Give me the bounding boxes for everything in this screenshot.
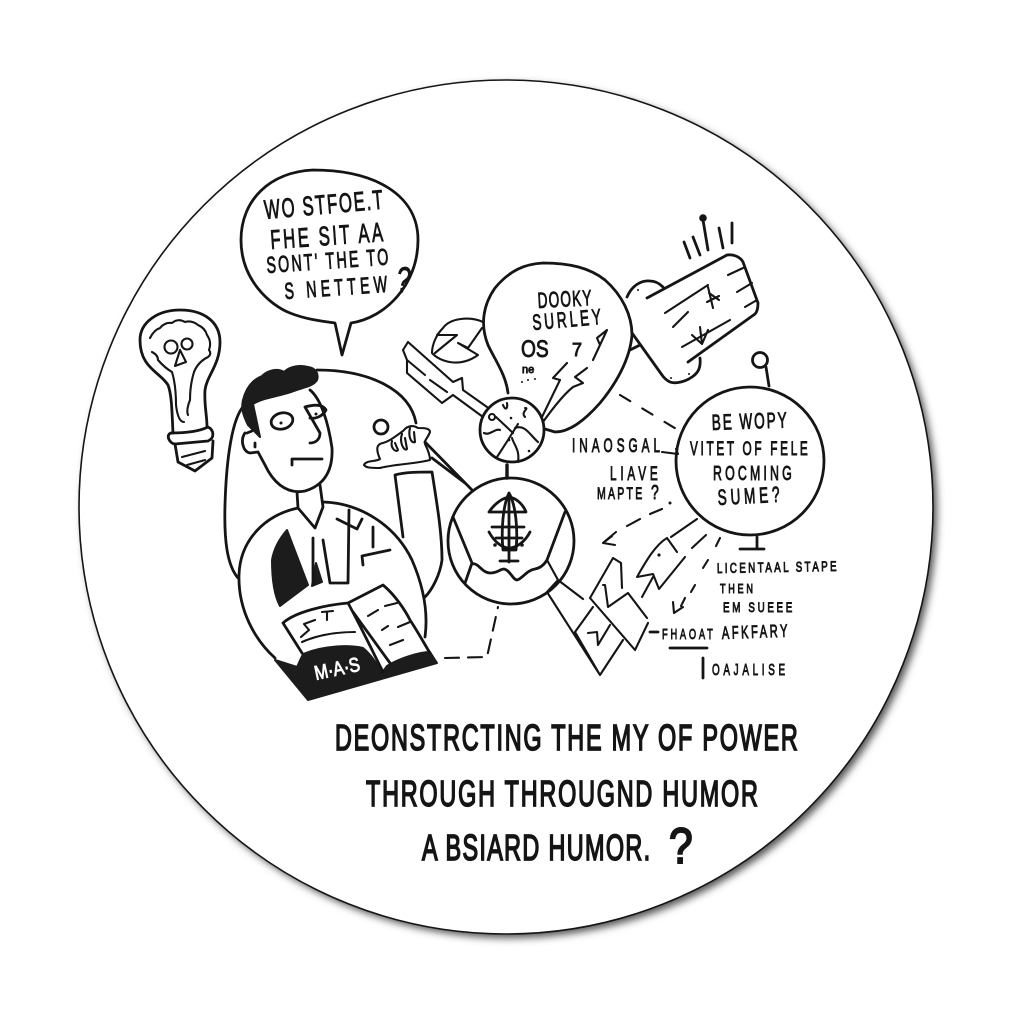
lightning bolts — [542, 330, 607, 422]
speech bubble text: SONT' THE TO — [266, 245, 389, 279]
question globe — [662, 352, 824, 549]
background blob behind person — [225, 370, 442, 597]
speech bubble text: WO STFOE.T — [263, 185, 384, 225]
cracked globe — [480, 398, 544, 462]
key shape — [403, 342, 487, 417]
neck and collar — [297, 485, 323, 528]
title: DEONSTRCTING THE MY OF POWER — [335, 719, 798, 758]
book — [275, 585, 437, 700]
right eye and nose — [305, 405, 326, 443]
left eye — [269, 410, 295, 432]
icon: light bulb — [140, 310, 220, 471]
bird icon — [637, 519, 706, 597]
card icon — [627, 255, 758, 383]
zigzag shapes — [547, 558, 648, 675]
side labels: LIAVE — [610, 464, 658, 485]
mouth — [292, 459, 322, 465]
lower circle emblem — [448, 478, 574, 604]
label strokes — [650, 632, 707, 678]
side labels: FHAOAT — [662, 626, 713, 643]
side labels: INAOSGAL — [572, 436, 660, 457]
tie — [312, 563, 322, 586]
dashed arrow down — [673, 538, 720, 613]
connector: globe to emblem — [505, 465, 509, 478]
balloon text: SURLEY — [531, 304, 602, 335]
side labels: OAJALISE — [712, 661, 785, 679]
title: ? — [669, 818, 693, 874]
question globe text: SUME? — [717, 481, 780, 510]
connector: book to lower circle — [445, 607, 498, 658]
balloon text: 7 — [572, 340, 582, 360]
torso — [239, 502, 426, 658]
title: A BSIARD HUMOR. — [422, 829, 650, 868]
side labels: THEN — [720, 583, 753, 596]
title: THROUGH THROUGND HUMOR — [366, 775, 758, 814]
side labels — [572, 436, 837, 679]
person — [225, 366, 472, 700]
circular sticker background — [79, 80, 937, 938]
hair — [242, 366, 318, 437]
dark lapel — [272, 530, 308, 606]
question globe text: ROCMING — [713, 462, 792, 485]
face — [243, 390, 332, 492]
side labels: LICENTAAL STAPE — [717, 558, 837, 576]
balloon text: DOOKY — [537, 285, 592, 313]
idea balloon — [484, 263, 632, 432]
pie chart icon — [432, 319, 483, 363]
speech bubble text: FHE SIT AA — [269, 217, 384, 255]
side labels: AFKFARY — [721, 621, 788, 644]
side labels: MAPTE — [597, 483, 642, 503]
shirt lines — [313, 510, 390, 585]
speech bubble text — [263, 185, 413, 305]
raised hand — [364, 420, 472, 490]
side labels: ? — [651, 480, 659, 504]
speech bubble text: ? — [394, 259, 413, 301]
speech bubble — [241, 170, 418, 355]
title — [335, 719, 798, 874]
dashed link between balloon and question globe — [620, 395, 678, 430]
question globe text: VITET OF FELE — [690, 439, 808, 460]
dashed arrow to emblem — [603, 509, 662, 545]
antenna — [766, 367, 769, 386]
book cover label: M·A·S — [312, 654, 362, 685]
question globe text: BE WOPY — [711, 407, 787, 435]
side labels: EM SUEEE — [723, 599, 792, 615]
balloon text — [521, 285, 602, 376]
balloon text: ne — [522, 364, 534, 376]
question globe text — [690, 407, 808, 510]
stand — [740, 537, 764, 549]
speech bubble text: S NETTEW — [284, 273, 388, 305]
balloon text: OS — [521, 335, 549, 363]
signal rays — [684, 214, 732, 258]
